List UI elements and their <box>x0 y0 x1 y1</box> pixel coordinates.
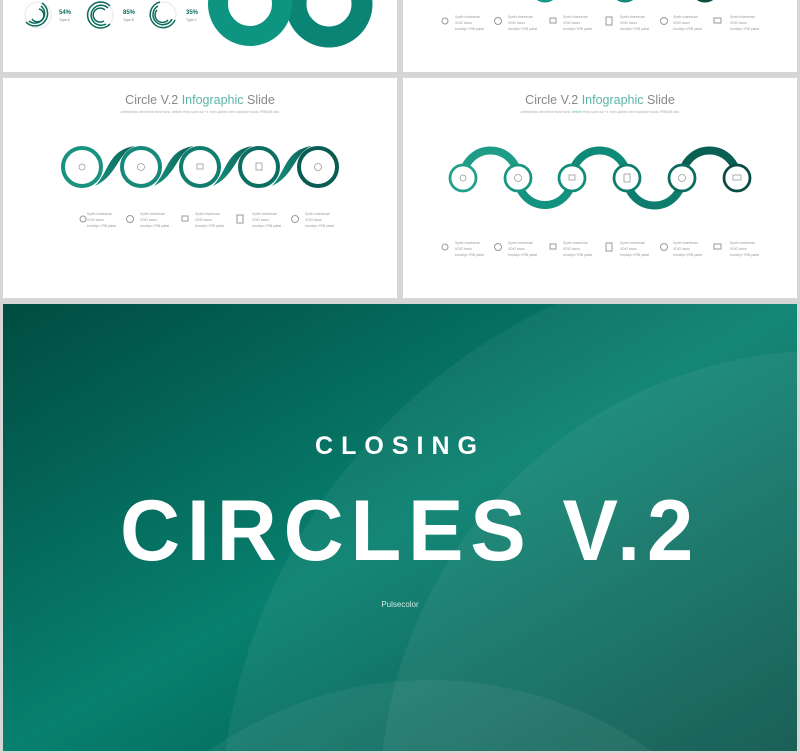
icon text row: brooklyn YRB pabst <box>508 253 537 257</box>
ring chart B <box>87 2 136 28</box>
icon text row: brooklyn YRB pabst <box>252 224 281 228</box>
icon text row: Synth chartreuse <box>563 15 588 19</box>
icon text row: brooklyn YRB pabst <box>620 253 649 257</box>
icon text row: brooklyn YRB pabst <box>87 224 116 228</box>
title: Circle V.2 Infographic Slide <box>525 93 675 107</box>
wave circles <box>450 165 750 191</box>
icon text row: brooklyn YRB pabst <box>140 224 169 228</box>
subtitle: Letterpress next level trust fund, before they sold out +1 meh gluten-free locavore tacos PBR&B tofu. <box>120 110 280 114</box>
icon text row: Synth chartreuse <box>87 212 112 216</box>
icon text row: Synth chartreuse <box>252 212 277 216</box>
icon text row: VDIG tacos <box>508 21 525 25</box>
icon text row: VDIG tacos <box>195 218 212 222</box>
inner icons <box>460 174 741 182</box>
icon text row: Synth chartreuse <box>620 15 645 19</box>
title: circles v.2: CIRCLES V.2 <box>120 483 700 579</box>
icon text row: VDIG tacos <box>563 247 580 251</box>
icon text row: Synth chartreuse <box>563 241 588 245</box>
ring chart B: 85% <box>123 10 136 16</box>
icon text row: Synth chartreuse <box>673 241 698 245</box>
ring chart A <box>25 2 72 28</box>
circles partial <box>532 0 718 1</box>
icon text row: VDIG tacos <box>730 247 747 251</box>
icon text row: VDIG tacos <box>563 21 580 25</box>
subtitle: closing: CLOSING <box>315 432 485 460</box>
icon text row: Synth chartreuse <box>140 212 165 216</box>
icon text row: VDIG tacos <box>140 218 157 222</box>
swooshes <box>95 146 312 186</box>
brand: Pulsecolor <box>381 600 419 609</box>
ring chart A: Type A <box>59 18 70 22</box>
inner icons <box>79 163 322 170</box>
icon text row: brooklyn YRB pabst <box>730 27 759 31</box>
icon text row: VDIG tacos <box>620 247 637 251</box>
wave path <box>463 150 737 206</box>
icon text row: Synth chartreuse <box>508 241 533 245</box>
ring circles <box>63 148 337 186</box>
icon text row: Synth chartreuse <box>455 15 480 19</box>
icon text row: brooklyn YRB pabst <box>455 253 484 257</box>
icon text row: brooklyn YRB pabst <box>195 224 224 228</box>
panel: closing slide <box>3 304 797 751</box>
panel: wave circles slide <box>403 78 797 298</box>
icon text row: VDIG tacos <box>673 247 690 251</box>
icon text row: brooklyn YRB pabst <box>730 253 759 257</box>
icon text row: Synth chartreuse <box>455 241 480 245</box>
icon text row: VDIG tacos <box>508 247 525 251</box>
ring chart C: Type C <box>186 18 198 22</box>
subtitle: Letterpress next level trust fund, before they sold out +1 meh gluten-free locavore tacos PBR&B tofu. <box>520 110 680 114</box>
icon text row: Synth chartreuse <box>305 212 330 216</box>
icon text row: brooklyn YRB pabst <box>305 224 334 228</box>
icon text row: VDIG tacos <box>455 21 472 25</box>
icon text row: VDIG tacos <box>87 218 104 222</box>
icon text row: brooklyn YRB pabst <box>455 27 484 31</box>
icon text row <box>80 212 334 228</box>
icon text row: brooklyn YRB pabst <box>508 27 537 31</box>
ring chart B: Type B <box>123 18 135 22</box>
icon text row: Synth chartreuse <box>730 241 755 245</box>
icon text row: Synth chartreuse <box>730 15 755 19</box>
icon text row <box>442 241 759 257</box>
icon text row: Synth chartreuse <box>620 241 645 245</box>
icon text row: VDIG tacos <box>620 21 637 25</box>
title: Circle V.2 Infographic Slide <box>125 93 275 107</box>
icon text row: VDIG tacos <box>305 218 322 222</box>
icon text row: brooklyn YRB pabst <box>563 27 592 31</box>
icon text row: VDIG tacos <box>252 218 269 222</box>
icon text row <box>442 15 759 31</box>
panel: swoosh circles slide <box>3 78 397 298</box>
icon text row: VDIG tacos <box>455 247 472 251</box>
ring chart C <box>150 2 199 28</box>
icon text row: VDIG tacos <box>730 21 747 25</box>
ring chart C: 35% <box>186 10 199 16</box>
icon text row: brooklyn YRB pabst <box>563 253 592 257</box>
icon text row: brooklyn YRB pabst <box>673 27 702 31</box>
infinity rings <box>218 0 362 37</box>
icon text row: Synth chartreuse <box>508 15 533 19</box>
icon text row: Synth chartreuse <box>195 212 220 216</box>
icon text row: brooklyn YRB pabst <box>673 253 702 257</box>
panel: top-left slide <box>3 0 397 72</box>
ring chart A: 54% <box>59 10 72 16</box>
icon text row: brooklyn YRB pabst <box>620 27 649 31</box>
panel: top-right slide <box>403 0 797 72</box>
icon text row: VDIG tacos <box>673 21 690 25</box>
icon text row: Synth chartreuse <box>673 15 698 19</box>
